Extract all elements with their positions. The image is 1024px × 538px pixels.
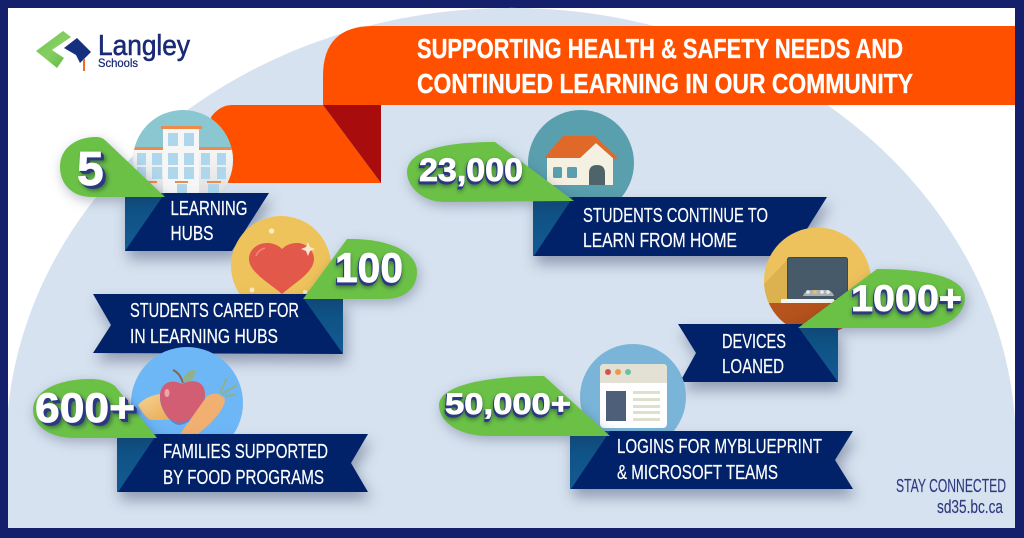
icon: laptop — [764, 228, 870, 330]
stat: 23,000 students — [407, 110, 827, 256]
banner main band — [323, 26, 1015, 105]
label — [163, 440, 328, 489]
ribbon — [570, 431, 853, 489]
label: BY FOOD PROGRAMS — [163, 466, 324, 489]
label: HUBS — [170, 222, 214, 245]
number badge — [439, 376, 610, 436]
logo mark: graduation cap — [64, 38, 91, 63]
label: FAMILIES SUPPORTED — [163, 440, 328, 463]
label: STUDENTS CARED FOR — [130, 299, 299, 322]
label: LOANED — [722, 355, 784, 378]
logo subtitle: Schools — [98, 56, 138, 70]
label: DEVICES — [722, 330, 786, 353]
stat: 50,000+ logins — [439, 344, 853, 489]
stat: 5 learning hubs — [60, 110, 269, 251]
stat: 600+ families supported — [33, 347, 368, 492]
banner lower fold — [211, 105, 381, 183]
label: LEARN FROM HOME — [583, 229, 737, 252]
label — [170, 197, 248, 245]
title text: SUPPORTING HEALTH & SAFETY NEEDS AND — [417, 33, 903, 64]
number badge — [303, 239, 417, 299]
label: STUDENTS CONTINUE TO — [583, 204, 768, 227]
number: 50,000+ — [445, 388, 571, 421]
number badge — [33, 379, 157, 438]
icon: heart — [231, 216, 331, 316]
footer: stay connected — [896, 476, 1006, 517]
label: LEARNING — [170, 197, 248, 220]
banner dark fold — [323, 105, 381, 183]
number: 23,000 — [419, 152, 523, 188]
icon: house — [528, 110, 634, 216]
label — [130, 299, 299, 348]
ribbon — [533, 197, 827, 256]
label — [722, 330, 786, 378]
logo — [36, 30, 190, 71]
stat: 1000+ devices — [678, 228, 965, 382]
logo mark: tassel — [83, 59, 85, 71]
number badge — [407, 142, 574, 202]
number: 100 — [335, 244, 403, 291]
logo wordmark: Langley — [98, 30, 190, 62]
label: LOGINS FOR MYBLUEPRINT — [617, 435, 822, 458]
label: & MICROSOFT TEAMS — [617, 461, 778, 484]
number badge — [60, 137, 165, 197]
number: 5 — [77, 143, 104, 196]
title text: CONTINUED LEARNING IN OUR COMMUNITY — [417, 68, 913, 99]
ribbon — [93, 294, 343, 354]
label — [617, 435, 822, 484]
icon: school building — [133, 110, 233, 193]
ribbon — [678, 324, 838, 382]
title banner — [211, 26, 1015, 183]
label — [583, 204, 768, 252]
number badge — [798, 269, 965, 328]
number: 1000+ — [851, 278, 962, 319]
label: IN LEARNING HUBS — [130, 325, 278, 348]
icon: food — [131, 347, 243, 459]
ribbon — [117, 434, 368, 492]
title text — [417, 33, 913, 99]
stat: 100 students cared for — [93, 216, 417, 354]
icon: browser window — [580, 344, 686, 450]
logo mark: green chevron — [36, 31, 71, 68]
ribbon — [125, 193, 269, 251]
number: 600+ — [35, 384, 135, 431]
footer: stay connected: sd35.bc.ca — [937, 497, 1004, 517]
